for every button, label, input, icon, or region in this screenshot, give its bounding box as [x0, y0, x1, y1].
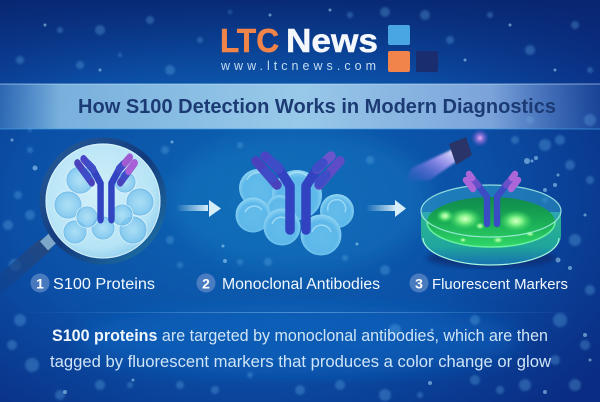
dish rim — [421, 185, 561, 237]
sphere highlights — [245, 172, 346, 232]
icon: antibody — [256, 156, 340, 230]
spheres cluster — [236, 169, 354, 256]
liquid — [427, 197, 555, 247]
icon: lens — [42, 140, 164, 262]
logo wordmark news: News — [286, 22, 378, 59]
title banner — [0, 84, 600, 130]
glass interior — [421, 185, 561, 237]
title: How S100 Detection Works in Modern Diagnostics — [78, 95, 556, 118]
caption — [50, 327, 551, 371]
arrow 2 — [366, 200, 406, 217]
dish body — [421, 212, 561, 265]
step 3 label: 3 — [415, 276, 423, 292]
caption: tagged by fluorescent markers that produces a color change or glow — [50, 353, 551, 371]
step 1 label: 1 — [36, 276, 44, 292]
icon: UV lamp — [404, 129, 489, 182]
step 1 label — [30, 274, 155, 293]
icon: antibody in lens — [77, 157, 135, 220]
divider — [20, 312, 580, 313]
glowing spots — [436, 208, 535, 244]
step 3 label: Fluorescent Markers — [432, 276, 568, 293]
logo wordmark: LTC — [220, 22, 279, 59]
step 1: magnifying glass illustration — [0, 140, 164, 288]
logo squares — [388, 25, 438, 72]
dish shadow — [427, 248, 555, 268]
step 2: antibody with protein cluster — [236, 156, 354, 256]
icon: magnifier handle — [0, 236, 55, 288]
logo url: www.ltcnews.com — [220, 59, 376, 73]
step 1 label: S100 Proteins — [53, 276, 155, 293]
step 2 label: Monoclonal Antibodies — [222, 276, 380, 293]
step 2 label: 2 — [202, 276, 210, 292]
step 3: petri dish illustration — [404, 129, 561, 268]
icon: antibody in dish — [466, 174, 518, 224]
arrow 1 — [176, 200, 221, 217]
caption: S100 proteins are targeted by monoclonal antibodies, which are then — [52, 327, 548, 345]
logo: LTC News — [220, 22, 438, 73]
spheres in lens — [54, 166, 154, 244]
